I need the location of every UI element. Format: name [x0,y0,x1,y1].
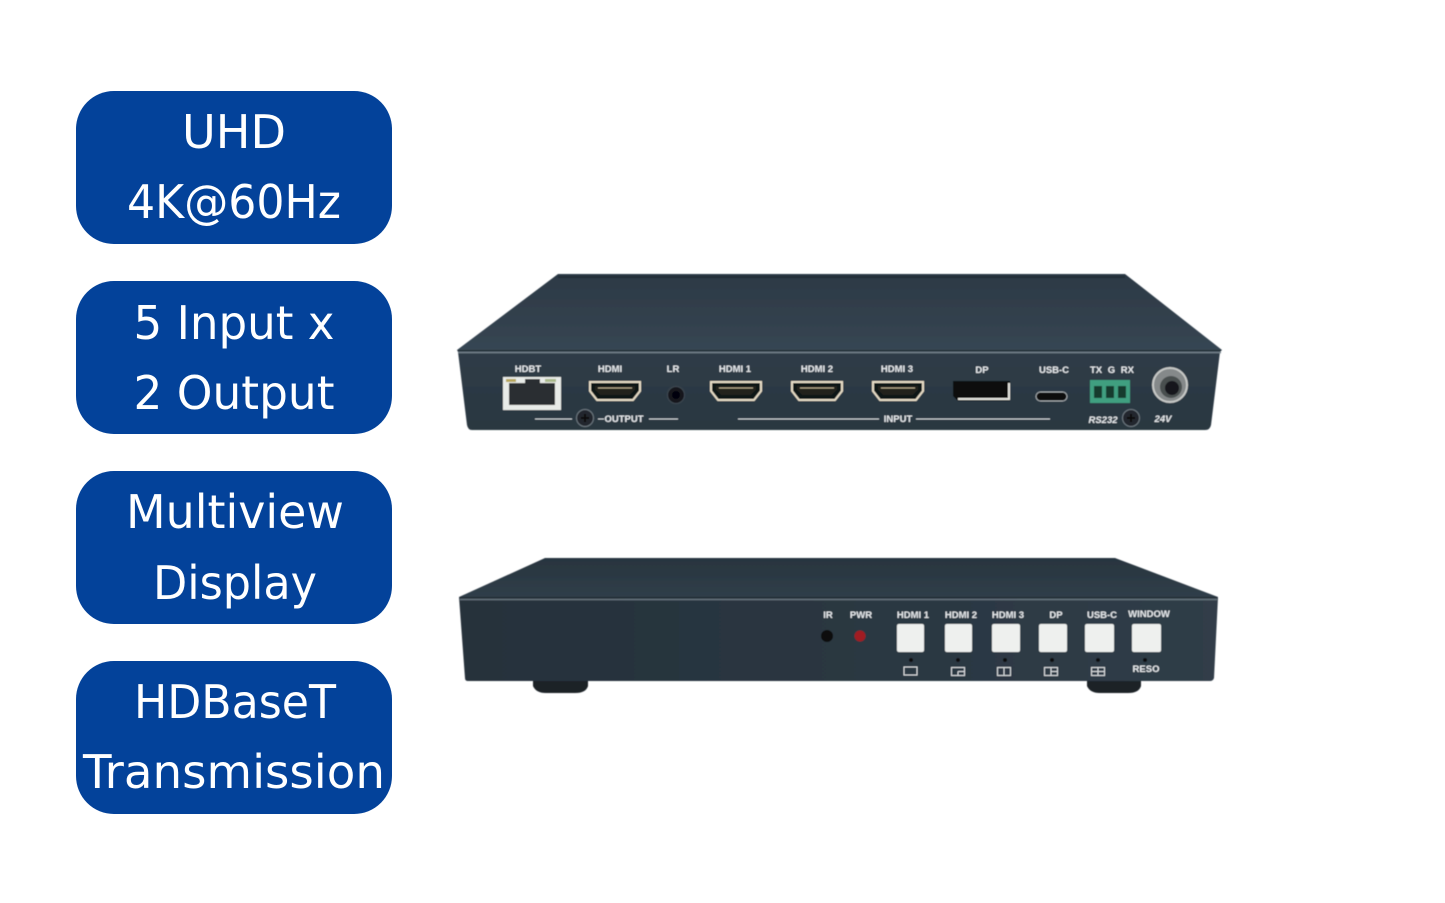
pill: Multiview Display: Display [153,556,317,610]
pill: UHD 4K@60Hz: 4K@60Hz [127,175,341,229]
port: HDMI output: HDMI [598,364,622,375]
pill: Multiview Display: Multiview [126,485,344,539]
pill: HDBaseT Transmission: Transmission [82,745,385,799]
foot left [533,680,588,693]
pill: 5 Input x 2 Output: 2 Output [134,366,334,420]
port: 24V power [1153,368,1187,425]
port: RS232 terminal: TX G RX [1090,365,1135,376]
button: DP [1039,610,1067,676]
pill: HDBaseT Transmission [76,661,392,814]
port: DP: DP [975,365,989,376]
button: HDMI 2: HDMI 2 [945,610,977,621]
port: HDMI 1: HDMI 1 [719,364,752,375]
pill: UHD 4K@60Hz: UHD [182,105,286,159]
port: LR audio [667,364,684,404]
input label: INPUT [884,414,912,425]
IR sensor [821,610,833,642]
pill: HDBaseT Transmission: HDBaseT [134,675,337,729]
button: USB-C [1085,610,1117,676]
port: USB-C [1036,365,1069,401]
output label: OUTPUT [604,414,644,425]
button: USB-C: USB-C [1087,610,1117,621]
IR sensor: IR [823,610,833,621]
button: WINDOW / RESO [1128,609,1170,675]
button: HDMI 1: HDMI 1 [897,610,930,621]
port: LR audio: LR [667,364,679,375]
button: HDMI 3: HDMI 3 [992,610,1024,621]
port: HDBT RJ45: HDBT [515,364,541,375]
port: HDMI 3 [873,364,923,400]
pill: 5 Input x 2 Output [76,281,392,434]
port: RS232 terminal [1088,365,1135,426]
button: DP: DP [1049,610,1063,621]
pill: 5 Input x 2 Output: 5 Input x [134,296,334,350]
button: HDMI 2 [945,610,977,676]
button: WINDOW / RESO: RESO [1133,664,1159,675]
port: HDMI 1 [711,364,761,400]
port: USB-C: USB-C [1039,365,1069,376]
rear chassis front face [457,350,1222,430]
pill: Multiview Display [76,471,392,624]
port: HDMI 2: HDMI 2 [801,364,833,375]
port: HDMI output [590,364,640,400]
device: rear panel [457,274,1222,430]
rear chassis top [457,274,1222,350]
front chassis top [459,558,1218,597]
port: 24V power: 24V [1154,414,1172,425]
port: HDBT RJ45 [503,364,561,410]
device: front panel [459,558,1218,693]
screws [576,410,1140,426]
port: HDMI 3: HDMI 3 [881,364,913,375]
foot right [1087,680,1141,693]
port: DP [953,365,1010,401]
port: RS232 terminal: RS232 [1088,415,1118,426]
port: HDMI 2 [792,364,842,400]
PWR LED: PWR [850,610,872,621]
button: HDMI 3 [992,610,1024,676]
pill: UHD 4K@60Hz [76,91,392,244]
front chassis face [459,597,1218,681]
button: HDMI 1 [897,610,930,675]
PWR LED [850,610,872,642]
button: WINDOW / RESO: WINDOW [1128,609,1170,620]
